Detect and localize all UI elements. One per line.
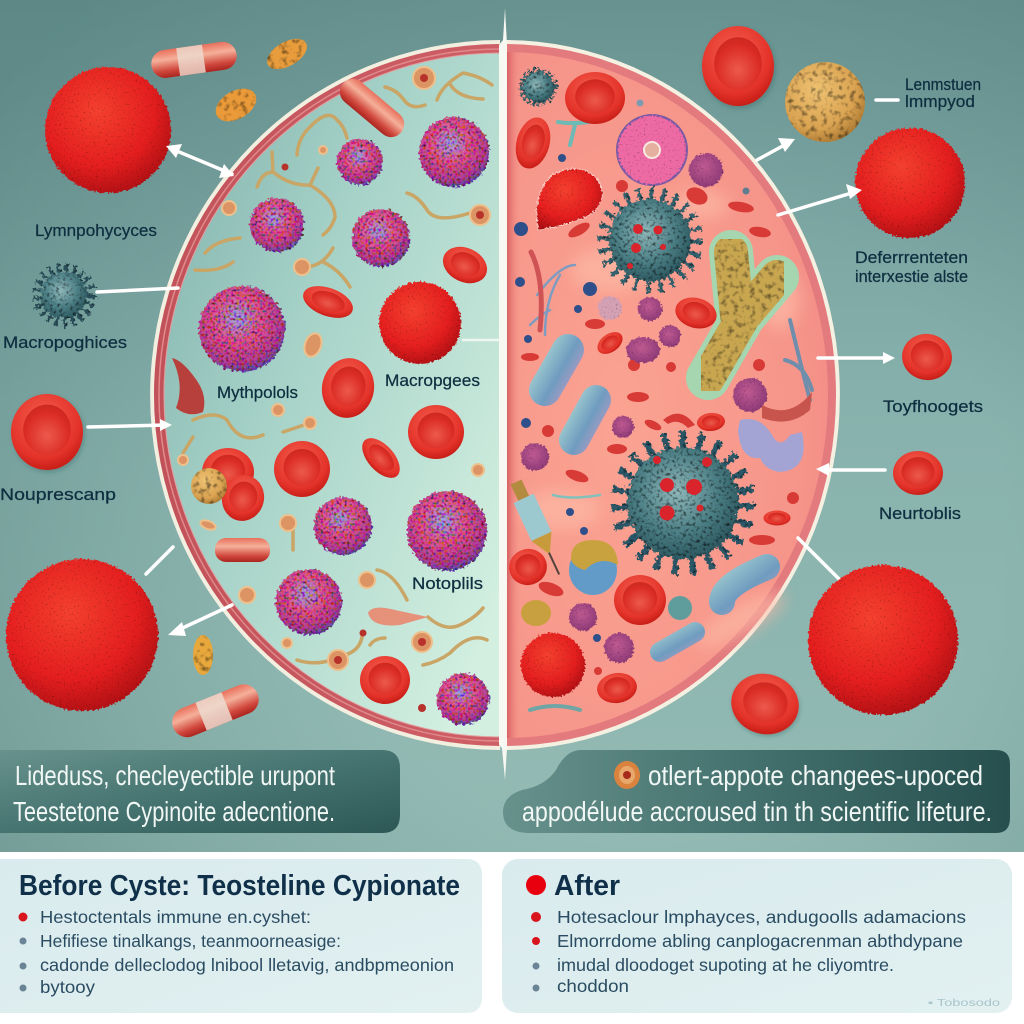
dark virus small [521, 70, 555, 104]
red wedge cell [537, 169, 602, 230]
red cell right upper [898, 330, 956, 384]
tissue highlights [520, 191, 800, 657]
virus upper [604, 194, 696, 286]
red slug cell [172, 358, 204, 414]
red tube at wall [762, 392, 812, 422]
arrow: red cell [88, 419, 172, 431]
donut cell [616, 114, 688, 186]
arrow: to sphere [166, 144, 234, 178]
arrow: to gold sphere [757, 138, 795, 160]
red cells: left chamber [202, 240, 493, 704]
label: lymphoid [905, 76, 981, 111]
large red sphere bottom left [6, 559, 158, 711]
label: interstitial: interxestie alste [855, 268, 968, 286]
small blue dots [514, 100, 750, 642]
panel: before summary [0, 859, 482, 1013]
label: lymphoid: lmmpyod [905, 93, 975, 111]
label: Neutrophils: Neurtoblis [879, 505, 961, 523]
red sphere lower [521, 633, 585, 697]
label: Neutrophils: Nouprescanp [0, 486, 116, 504]
red cell left top [510, 114, 556, 172]
large red sphere top left [45, 67, 171, 193]
watermark: ▪ Tobosodo [928, 998, 1001, 1009]
red cell bottom [724, 666, 806, 742]
heading: after: After [554, 870, 620, 902]
virus lower red dots [653, 456, 712, 520]
red textured sphere [379, 282, 461, 364]
bullet list: before: cadonde delleclodog lnibool lletavig, andbpmeonion [40, 955, 454, 975]
label: Neutrophils: Notoplils [412, 575, 483, 593]
panel: after summary [502, 859, 1012, 1013]
arrow: red cell right lower [816, 463, 885, 476]
dark virus [37, 268, 91, 322]
pink cell [689, 153, 723, 187]
capsule: bacillus top [335, 74, 409, 142]
teal small cell [668, 596, 692, 620]
orange oval lower [210, 82, 262, 128]
panel: before half of cross-section [150, 40, 500, 750]
panel: after half of cross-section [505, 40, 840, 750]
center divider [499, 8, 507, 780]
label: Trophoblasts: Toyfhoogets [883, 398, 983, 416]
bullet list: after: choddon [557, 976, 629, 996]
banner: left: Teestetone Cypinoite adecntione. [13, 796, 335, 827]
bullet list: before: bytooy [40, 977, 95, 997]
banner: left: Lideduss, checleyectible urupont [15, 760, 335, 791]
tissue strands [530, 120, 812, 710]
bullet list: after: imudal dloodoget supoting at he cliyomtre. [557, 955, 894, 975]
bullet list: before: Hestoctentals immune en.cyshet: [40, 907, 311, 927]
arrow: to red sphere [778, 184, 862, 215]
myeloid speckled cells [199, 117, 489, 725]
outside right column [702, 26, 983, 742]
label: lymphoid: Lenmstuen [905, 76, 981, 94]
tan squiggles [183, 73, 492, 665]
white pointer [462, 339, 499, 341]
gold sphere [785, 62, 865, 142]
arrow: virus [97, 288, 178, 292]
label: interstitial: Deferrrenteten [855, 249, 968, 267]
big red sphere right [808, 565, 958, 715]
pointer: gold sphere label [876, 98, 898, 102]
red fragments [521, 180, 799, 675]
capsule: bacillus mid [215, 538, 270, 562]
lilac folded cell [738, 419, 804, 472]
bullet list: before: Hefifiese tinalkangs, teanmoorneasige: [40, 931, 341, 951]
heading: after [526, 870, 620, 902]
arrow: to lower sphere [168, 605, 232, 636]
bullet list: after: Elmorrdome abling canplogacrenman abthdypane [557, 931, 963, 951]
orange oval bottom [193, 635, 213, 675]
bullet list: after [531, 907, 966, 996]
vessel wall: right [505, 40, 840, 750]
Y chromosome shape [708, 252, 777, 378]
capsule bottom [168, 680, 263, 742]
label: Macrophages: Macropgees [385, 372, 480, 390]
banner: right [503, 750, 1010, 833]
small rings [178, 67, 490, 670]
banner: right: otlert-appote changees-upoced [648, 760, 983, 791]
red blob cell [565, 72, 625, 124]
label: Lymphocytes: Lymnpohycyces [35, 222, 157, 240]
label: Myelophils: Mythpolols [217, 384, 298, 402]
virus lower [621, 441, 745, 565]
capsule top [149, 40, 239, 80]
bullet list: before [18, 907, 454, 997]
gold cell [191, 468, 227, 504]
syringe [506, 477, 569, 579]
vessel wall: left [150, 40, 500, 750]
red sphere right [855, 128, 965, 238]
red cells: right chamber [505, 293, 790, 706]
arrow: short line [146, 547, 173, 574]
arrow: red cell right [818, 352, 895, 364]
virus upper red dots [627, 224, 666, 269]
red cell left [11, 394, 83, 470]
label: interstitial [855, 249, 968, 286]
orange oval upper [262, 33, 312, 75]
gold cell lower [521, 600, 551, 626]
blue capsules [545, 350, 767, 652]
heading: before: Before Cyste: Teosteline Cypionate [19, 870, 460, 902]
red cell top [702, 26, 774, 106]
label: Macrophages: Macropoghices [3, 334, 127, 352]
outside left column [0, 33, 312, 742]
arrow: to big sphere [798, 538, 850, 590]
banner: left [0, 750, 400, 833]
red dots [282, 74, 484, 712]
white footer band [0, 852, 1024, 1024]
tadpole bacillus [368, 608, 428, 626]
icon: ring [614, 761, 640, 789]
pink textured balls [521, 296, 767, 663]
red cell right lower [893, 451, 943, 495]
gold and blue cell [569, 540, 618, 595]
bullet list: after: Hotesaclour lmphayces, andugoolls adamacions [557, 907, 966, 927]
